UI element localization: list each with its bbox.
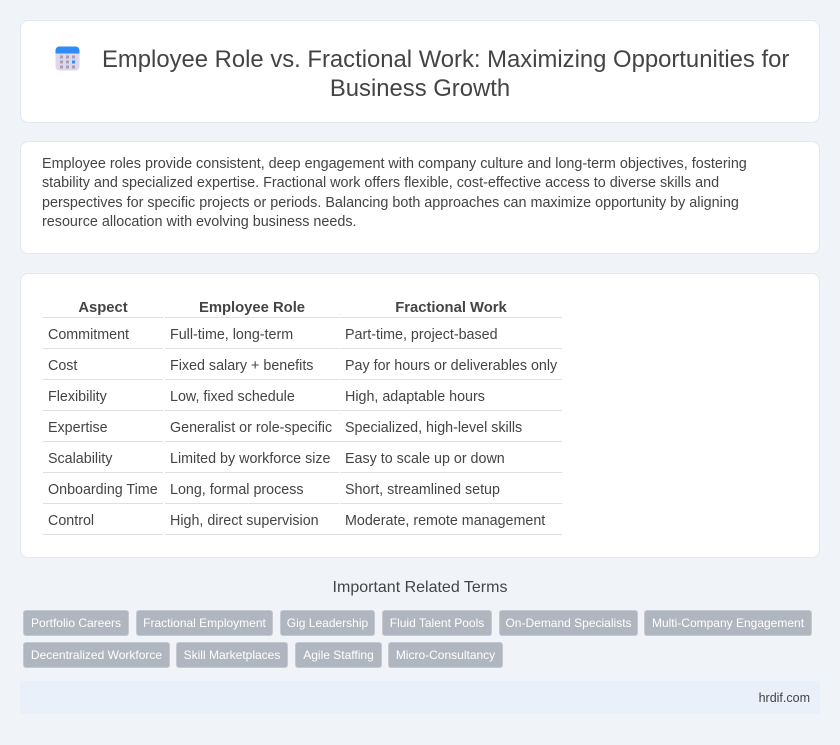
title: Business Growth xyxy=(330,75,510,102)
related terms heading: Important Related Terms xyxy=(333,579,507,596)
comparison table: Full-time, long-term xyxy=(170,327,293,343)
comparison table xyxy=(43,300,562,535)
related term tags: Fractional Employment xyxy=(143,616,266,630)
comparison table: Expertise xyxy=(48,420,108,436)
table panel xyxy=(20,273,820,558)
related term tags: Skill Marketplaces xyxy=(184,648,280,662)
intro text xyxy=(42,156,747,230)
comparison table: Part-time, project-based xyxy=(345,327,498,343)
intro panel xyxy=(20,141,820,254)
intro text: perspectives for specific projects or periods. Balancing both approaches can maximize opportunity by aligning xyxy=(42,195,739,211)
comparison table: Cost xyxy=(48,358,77,374)
comparison table: Short, streamlined setup xyxy=(345,482,500,498)
footer credit: hrdif.com xyxy=(759,691,810,705)
comparison table: Easy to scale up or down xyxy=(345,451,505,467)
comparison table: Fixed salary + benefits xyxy=(170,358,313,374)
comparison table: Specialized, high-level skills xyxy=(345,420,522,436)
comparison table: Employee Role xyxy=(199,300,305,316)
related term tags: Fluid Talent Pools xyxy=(390,616,484,630)
comparison table: Commitment xyxy=(48,327,129,343)
comparison table: Low, fixed schedule xyxy=(170,389,295,405)
comparison table: Flexibility xyxy=(48,389,107,405)
related term tags: Gig Leadership xyxy=(287,616,368,630)
comparison table: High, direct supervision xyxy=(170,513,319,529)
comparison table: High, adaptable hours xyxy=(345,389,485,405)
related term tags: Portfolio Careers xyxy=(31,616,121,630)
header panel xyxy=(20,20,820,123)
comparison table: Aspect xyxy=(78,300,128,316)
comparison table: Fractional Work xyxy=(395,300,507,316)
related term tags: Decentralized Workforce xyxy=(31,648,162,662)
comparison table: Long, formal process xyxy=(170,482,304,498)
related term tags: Micro-Consultancy xyxy=(396,648,495,662)
comparison table: Limited by workforce size xyxy=(170,451,330,467)
comparison table: Moderate, remote management xyxy=(345,513,545,529)
related term tags xyxy=(23,610,812,668)
title: Employee Role vs. Fractional Work: Maximizing Opportunities for xyxy=(102,46,789,73)
comparison table: Onboarding Time xyxy=(48,482,158,498)
comparison table: Scalability xyxy=(48,451,112,467)
comparison table: Control xyxy=(48,513,94,529)
intro text: stability and specialized expertise. Fractional work offers flexible, cost-effective access to diverse skills and xyxy=(42,175,719,191)
icon: calendar xyxy=(56,46,80,70)
related term tags: Agile Staffing xyxy=(303,648,374,662)
title xyxy=(102,46,789,102)
comparison table: Pay for hours or deliverables only xyxy=(345,358,557,374)
intro text: resource allocation with evolving business needs. xyxy=(42,214,356,230)
footer bar xyxy=(20,681,820,714)
related term tags: On-Demand Specialists xyxy=(505,616,632,630)
comparison table: Generalist or role-specific xyxy=(170,420,332,436)
intro text: Employee roles provide consistent, deep engagement with company culture and long-term objectives, fostering xyxy=(42,156,747,172)
related term tags: Multi-Company Engagement xyxy=(652,616,804,630)
